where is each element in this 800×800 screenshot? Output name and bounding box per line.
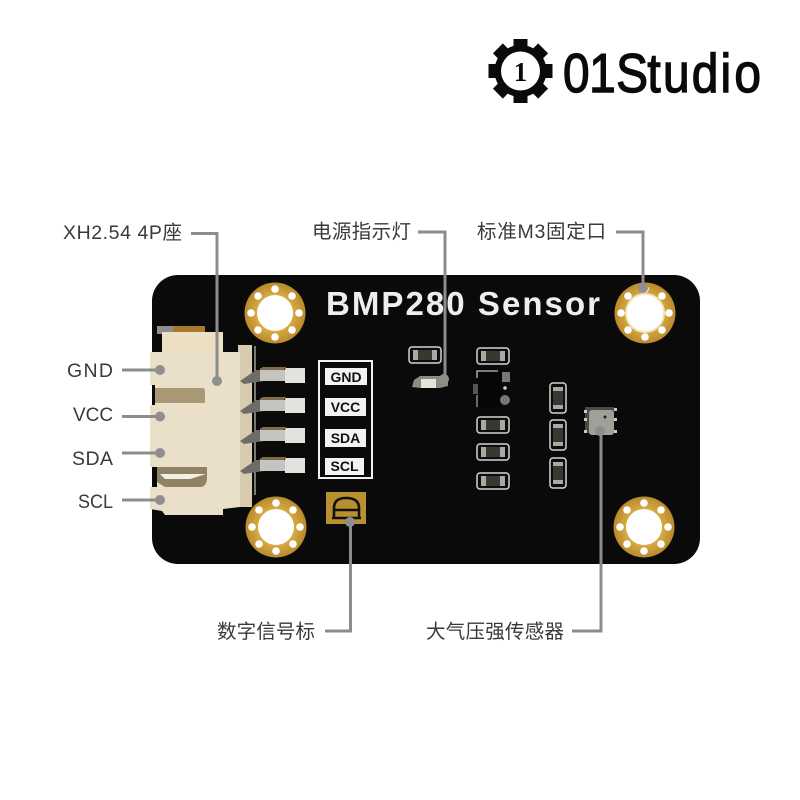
digital signal mark pad [326,492,366,524]
callout: GND [67,360,165,382]
connector: XH2.54 4P socket [150,326,255,515]
mounting hole: bottom left [246,496,306,558]
callout: M3 mounting hole: 标准M3固定口 [477,221,606,243]
mounting hole: top right [614,282,676,344]
icon: gear with numeral 1: 1 [514,57,527,87]
pin label box [319,361,372,478]
pin label: SDA: SDA [331,430,360,446]
top cap [162,332,223,352]
callout: M3 mounting hole [477,221,648,293]
callout: XH2.54 4P socket [63,222,222,386]
callout: XH2.54 4P socket: XH2.54 4P座 [63,222,182,244]
SMD components [409,347,566,489]
callout: digital signal mark [217,517,355,643]
voltage regulator chip [473,370,510,407]
main body [150,352,240,515]
mounting hole: top left [244,282,306,344]
logo: 01Studio [488,39,761,104]
callout: SCL: SCL [78,491,113,513]
board base [152,275,700,564]
pin label: VCC: VCC [331,399,360,415]
callout: VCC: VCC [73,404,113,426]
callout: pressure sensor: 大气压强传感器 [426,621,564,643]
logo wordmark: 01Studio [563,42,761,104]
metal shell behind cap [157,326,173,334]
callout: power LED [312,221,449,384]
callout: SCL [78,491,165,513]
pin label: GND: GND [330,369,362,385]
callout: digital signal mark: 数字信号标 [217,621,315,643]
pin label: SCL: SCL [330,458,359,474]
callout: SDA: SDA [72,448,113,470]
pin leads [240,368,305,474]
callout: VCC [73,404,165,426]
mounting hole: bottom right [614,496,674,558]
callout: pressure sensor [426,426,605,643]
icon: gear with numeral 1 [488,39,552,103]
callout: GND: GND [67,360,113,382]
side band [238,345,252,507]
panel: BMP280 circuit board [150,275,700,564]
board title: BMP280 Sensor [326,285,600,322]
lower latch window [157,467,207,487]
callout: power LED: 电源指示灯 [312,221,411,243]
pressure sensor chip [584,407,617,435]
callout: SDA [72,448,165,470]
upper latch window [155,388,205,403]
power LED [412,376,448,388]
